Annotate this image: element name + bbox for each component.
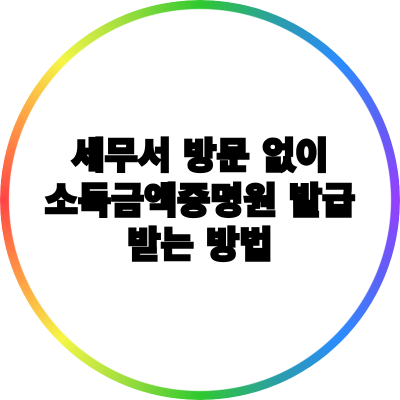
title line 2: 소득금액증명원 발급 [45,180,355,221]
title line 3: 받는 방법 [128,224,272,265]
title line 1: 세무서 방문 없이 [72,135,328,176]
